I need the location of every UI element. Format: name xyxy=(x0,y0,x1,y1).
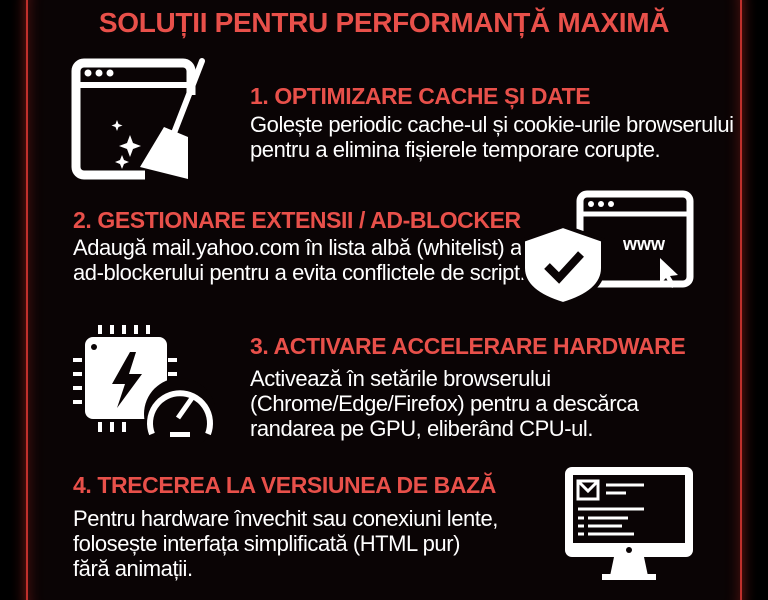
heading 2: 2. GESTIONARE EXTENSII / AD-BLOCKER xyxy=(73,207,521,233)
icon: shield and browser: www xyxy=(622,234,666,254)
body 4: fără animații. xyxy=(73,556,193,581)
body 1 xyxy=(250,112,734,162)
heading 4: 4. TRECEREA LA VERSIUNEA DE BAZĂ xyxy=(73,472,496,498)
heading 3: 3. ACTIVARE ACCELERARE HARDWARE xyxy=(250,333,685,359)
icon: browser with broom xyxy=(72,58,205,180)
icon: shield and browser xyxy=(521,190,694,302)
body 1: pentru a elimina fișierele temporare corupte. xyxy=(250,137,660,162)
heading 1: 1. OPTIMIZARE CACHE ȘI DATE xyxy=(250,83,590,109)
body 3: randarea pe GPU, eliberând CPU-ul. xyxy=(250,416,593,441)
body 2: Adaugă mail.yahoo.com în lista albă (whitelist) a xyxy=(73,235,522,260)
body 4: Pentru hardware învechit sau conexiuni lente, xyxy=(73,506,498,531)
icon: monitor xyxy=(565,467,693,580)
body 2: ad-blockerului pentru a evita conflictele de script. xyxy=(73,260,525,285)
body 4 xyxy=(73,506,498,581)
body 4: folosește interfața simplificată (HTML pur) xyxy=(73,531,460,556)
body 3 xyxy=(250,366,639,441)
icon: chip with gauge xyxy=(73,325,213,437)
body 3: Activează în setările browserului xyxy=(250,366,551,391)
body 1: Golește periodic cache-ul și cookie-urile browserului xyxy=(250,112,734,137)
title: SOLUȚII PENTRU PERFORMANȚĂ MAXIMĂ xyxy=(99,7,669,38)
body 2 xyxy=(73,235,525,285)
body 3: (Chrome/Edge/Firefox) pentru a descărca xyxy=(250,391,638,416)
